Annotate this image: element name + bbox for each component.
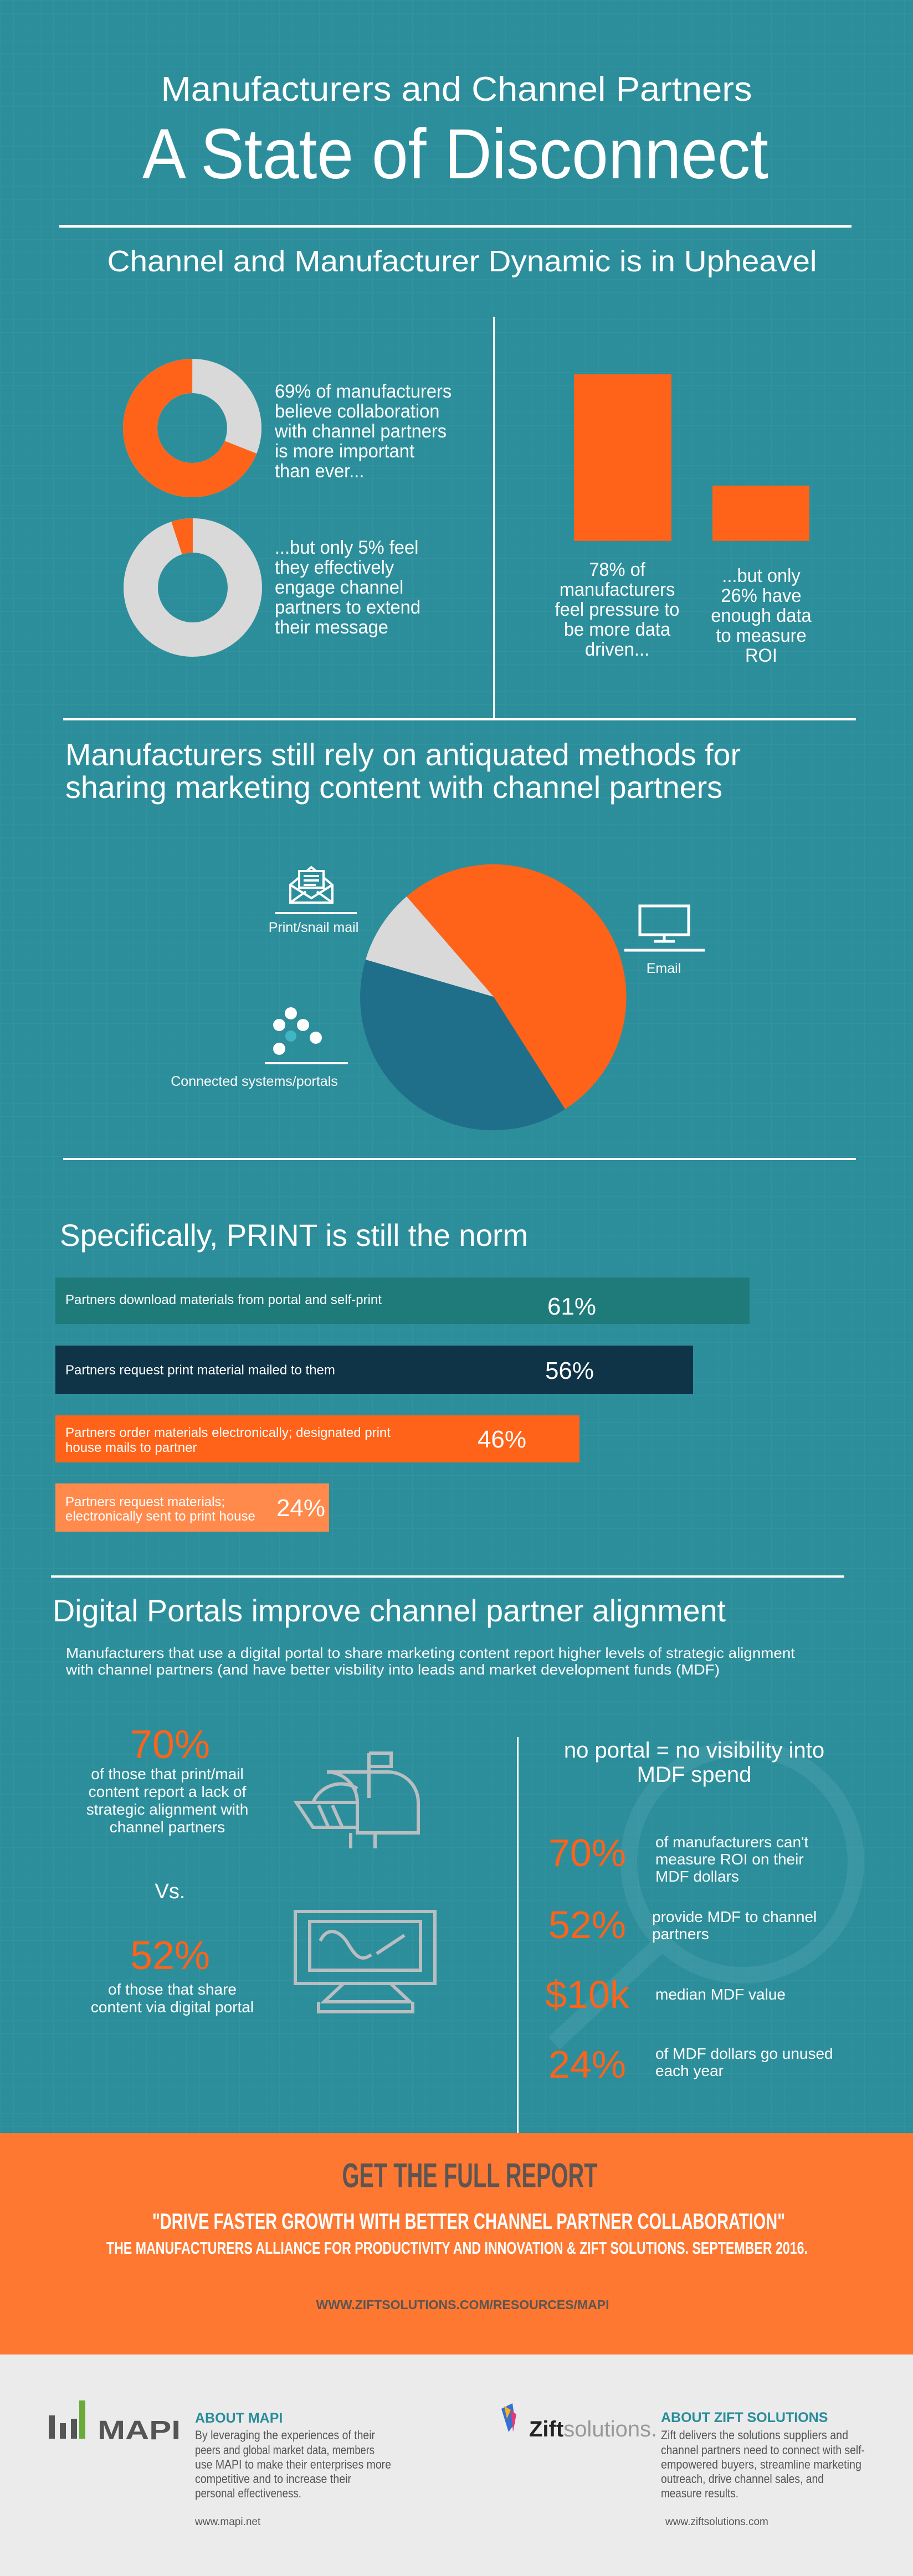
stat: 70% print/mail xyxy=(86,1723,248,1836)
icon: monitor chart xyxy=(295,1912,435,2012)
title xyxy=(142,70,768,194)
heading: no portal xyxy=(564,1738,824,1787)
text: 69%: than ever... xyxy=(275,461,364,482)
text: about MAPI: use MAPI to make their enterprises more xyxy=(195,2457,391,2471)
bar: 46%: 46% xyxy=(478,1426,526,1453)
text: about MAPI xyxy=(194,2410,391,2528)
text: about MAPI: ABOUT MAPI xyxy=(195,2410,283,2426)
label: connected systems: Connected systems/portals xyxy=(171,1074,338,1089)
heading: antiquated methods xyxy=(65,737,741,805)
banner: get full report xyxy=(0,2133,913,2355)
text: about MAPI: competitive and to increase their xyxy=(195,2472,351,2486)
bar: 61%: Partners download materials from portal and self-print xyxy=(65,1292,382,1307)
stat list: MDF: MDF dollars xyxy=(655,1868,739,1885)
bar: 46%: house mails to partner xyxy=(65,1440,197,1455)
stat list: MDF: each year xyxy=(655,2062,724,2079)
bar: 46% xyxy=(55,1415,579,1462)
text: about Zift: ABOUT ZIFT SOLUTIONS xyxy=(661,2410,828,2425)
stat list: MDF: of MDF dollars go unused xyxy=(655,2045,833,2062)
bar: 61% xyxy=(55,1277,750,1324)
label: email: Email xyxy=(647,961,681,976)
stat list: MDF: 52% xyxy=(548,1903,626,1946)
text: about Zift: measure results. xyxy=(661,2486,738,2500)
icon: monitor xyxy=(624,906,705,950)
text: 26%: to measure xyxy=(716,625,807,646)
text: about MAPI: peers and global market data, members xyxy=(195,2443,375,2457)
logo: MAPI: MAPI xyxy=(98,2416,181,2445)
bar: 24%: 24% xyxy=(276,1495,325,1522)
intro text: with channel partners (and have better visbility into leads and market development funds (MDF) xyxy=(65,1661,720,1678)
stat: 52% portal: content via digital portal xyxy=(91,1998,254,2016)
stat list: MDF: of manufacturers can't xyxy=(655,1833,808,1851)
text: 69%: believe collaboration xyxy=(275,401,439,422)
bar: 56%: Partners request print material mailed to them xyxy=(65,1363,335,1378)
bar: 24%: electronically sent to print house xyxy=(65,1509,255,1524)
bar: 56% xyxy=(55,1346,693,1394)
text: 5%: they effectively xyxy=(275,557,394,578)
text: 5%: engage channel xyxy=(275,577,403,598)
stat: 70% print/mail: of those that print/mail xyxy=(91,1765,244,1782)
text: 78% xyxy=(555,559,679,660)
label: print: Print/snail mail xyxy=(269,920,358,935)
text: 26%: ...but only xyxy=(722,565,801,586)
text: about Zift: empowered buyers, streamline marketing xyxy=(661,2457,861,2471)
bar: 56%: 56% xyxy=(545,1357,594,1384)
stat: 52% portal: of those that share xyxy=(108,1981,237,1998)
text: vs: Vs. xyxy=(155,1880,185,1903)
text: about Zift: Zift delivers the solutions suppliers and xyxy=(661,2428,848,2442)
text: about Zift xyxy=(661,2410,865,2528)
icon: mailbox xyxy=(296,1753,418,1848)
watermark: magnifier xyxy=(554,1748,856,2043)
banner: get full report: WWW.ZIFTSOLUTIONS.COM/RESOURCES/MAPI xyxy=(316,2297,609,2312)
stat: 70% print/mail: channel partners xyxy=(110,1818,225,1836)
text: about MAPI: personal effectiveness. xyxy=(195,2486,301,2500)
text: 69% xyxy=(274,381,452,482)
intro text xyxy=(65,1645,796,1678)
stat list: MDF: $10k xyxy=(545,1973,630,2016)
text: about MAPI: www.mapi.net xyxy=(194,2516,261,2528)
banner: get full report: GET THE FULL REPORT xyxy=(342,2157,598,2195)
text: about MAPI: By leveraging the experiences of their xyxy=(195,2428,375,2442)
text: 26%: ROI xyxy=(745,645,777,666)
icon: connected dots xyxy=(265,1007,348,1064)
text: 5%: partners to extend xyxy=(275,597,420,618)
stat list: MDF xyxy=(545,1831,833,2086)
text: about Zift: outreach, drive channel sales, and xyxy=(661,2472,824,2486)
heading: no portal: no portal = no visibility into xyxy=(564,1738,824,1763)
bar: 46%: Partners order materials electronically; designated print xyxy=(65,1425,391,1440)
text: about Zift: channel partners need to connect with self- xyxy=(661,2443,865,2457)
stat list: MDF: 24% xyxy=(548,2043,626,2086)
text: 78%: manufacturers xyxy=(560,579,675,600)
bar: 24% xyxy=(55,1483,329,1532)
text: 69%: is more important xyxy=(275,441,415,462)
stat: 52% portal: 52% xyxy=(130,1934,210,1978)
title: Manufacturers and Channel Partners xyxy=(161,70,752,109)
heading: no portal: MDF spend xyxy=(637,1763,751,1787)
logo: MAPI xyxy=(49,2400,181,2445)
text: 78%: be more data xyxy=(564,619,671,640)
heading: dynamic in upheaval: Channel and Manufacturer Dynamic is in Upheavel xyxy=(107,245,817,278)
heading: antiquated methods: Manufacturers still rely on antiquated methods for xyxy=(65,737,741,772)
logo: Zift xyxy=(501,2403,657,2441)
intro text: Manufacturers that use a digital portal to share marketing content report higher levels of strategic alignment xyxy=(66,1645,796,1661)
text: 5%: their message xyxy=(275,617,388,638)
donut: 5% xyxy=(127,522,258,653)
heading: digital portals: Digital Portals improve channel partner alignment xyxy=(53,1593,726,1628)
stat list: MDF: partners xyxy=(652,1925,709,1943)
footer xyxy=(0,2355,913,2576)
bar: 24%: Partners request materials; xyxy=(65,1495,225,1509)
bar: 61%: 61% xyxy=(547,1293,596,1320)
title: A State of Disconnect xyxy=(142,115,768,194)
stat list: MDF: provide MDF to channel xyxy=(652,1908,817,1925)
text: 26%: 26% have xyxy=(721,585,802,606)
text: 26%: enough data xyxy=(711,605,812,626)
text: 5% xyxy=(275,537,420,638)
text: 78%: feel pressure to xyxy=(555,599,679,620)
heading: antiquated methods: sharing marketing content with channel partners xyxy=(65,770,722,805)
bar chart: data driven xyxy=(574,374,809,541)
text: 26% xyxy=(711,565,812,666)
text: 78%: 78% of xyxy=(589,559,646,580)
stat: 70% print/mail: 70% xyxy=(130,1723,210,1767)
heading: print is the norm: Specifically, PRINT is still the norm xyxy=(60,1218,528,1253)
stat: 52% portal xyxy=(91,1934,254,2016)
stat: 70% print/mail: strategic alignment with xyxy=(86,1801,248,1818)
stat list: MDF: 70% xyxy=(548,1831,626,1874)
icon: envelope xyxy=(275,867,357,913)
text: 78%: driven... xyxy=(585,639,649,660)
stat list: MDF: measure ROI on their xyxy=(655,1851,804,1868)
pie chart xyxy=(360,864,627,1130)
stat list: MDF: median MDF value xyxy=(655,1986,786,2003)
stat: 70% print/mail: content report a lack of xyxy=(89,1783,247,1800)
donut: 69% xyxy=(125,360,260,496)
text: 69%: 69% of manufacturers xyxy=(275,381,452,402)
text: about Zift: www.ziftsolutions.com xyxy=(665,2516,768,2528)
text: 5%: ...but only 5% feel xyxy=(275,537,418,558)
logo: Zift: Ziftsolutions. xyxy=(529,2417,657,2441)
text: 69%: with channel partners xyxy=(274,421,447,442)
